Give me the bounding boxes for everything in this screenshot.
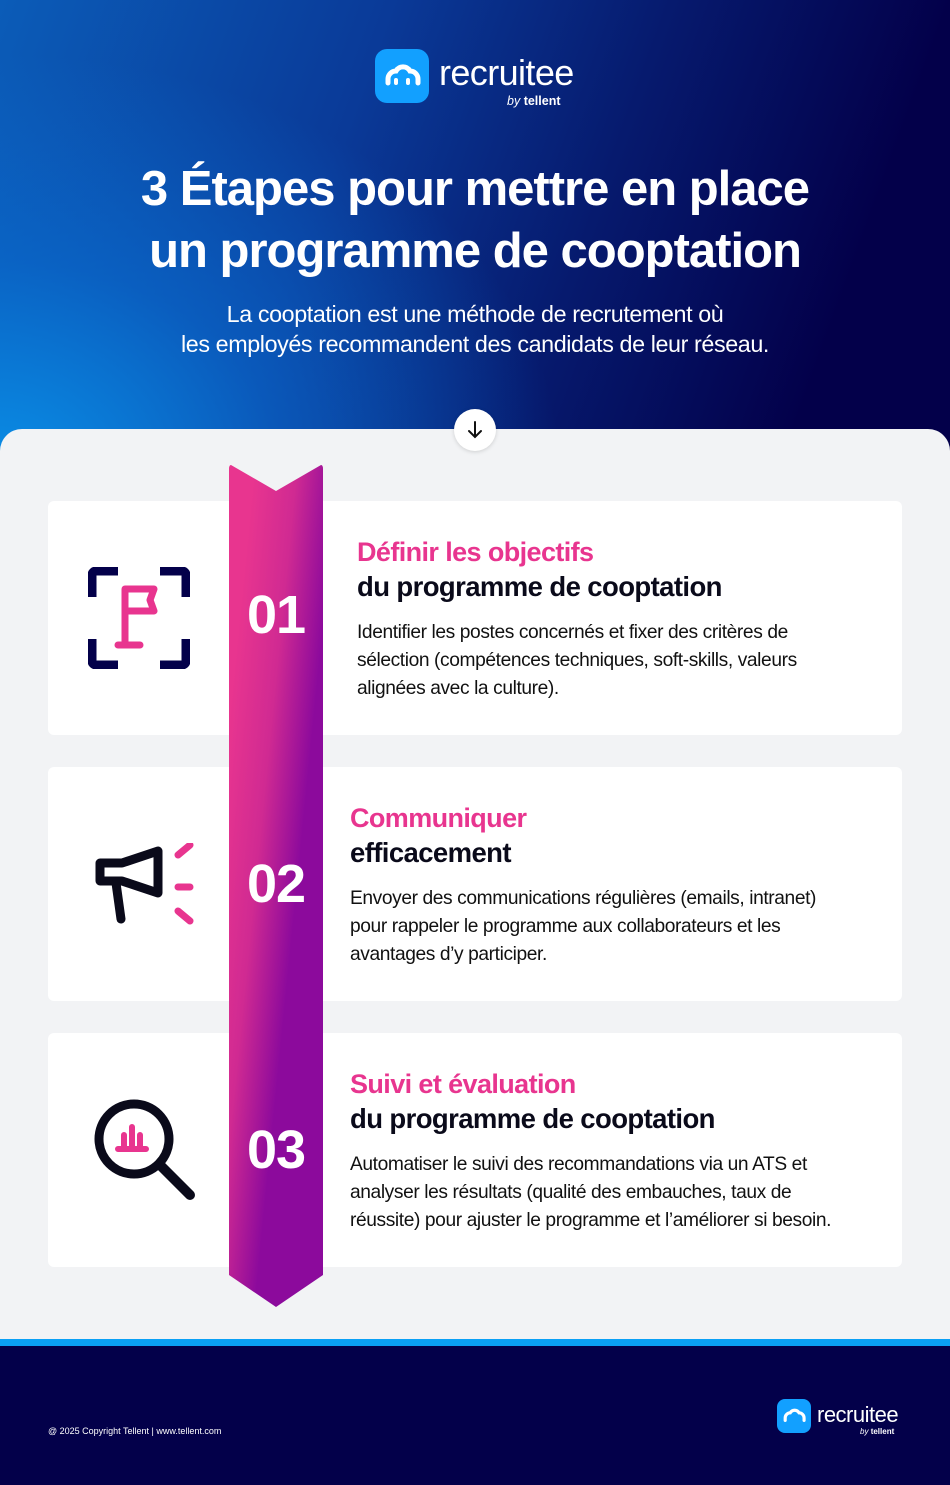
footer stripe bbox=[0, 1339, 950, 1346]
logo bbox=[375, 49, 574, 108]
card 3: du programme de cooptation bbox=[350, 1103, 715, 1134]
subtitle bbox=[181, 301, 769, 357]
footer logo: recruitee bbox=[817, 1402, 898, 1427]
icon: megaphone bbox=[96, 843, 194, 924]
ribbon bbox=[229, 465, 323, 1307]
card 1: du programme de cooptation bbox=[357, 571, 722, 602]
icon: magnifier chart bbox=[94, 1100, 195, 1200]
card 2: pour rappeler le programme aux collaborateurs et les bbox=[350, 916, 780, 937]
card 1: alignées avec la culture). bbox=[357, 678, 559, 699]
card 1 bbox=[48, 501, 902, 735]
card 3: Automatiser le suivi des recommandations via un ATS et bbox=[350, 1154, 807, 1175]
icon: flag bbox=[88, 567, 190, 669]
number 02: 02 bbox=[247, 854, 305, 914]
card 2: Envoyer des communications régulières (emails, intranet) bbox=[350, 888, 816, 909]
card 2: efficacement bbox=[350, 837, 511, 868]
number 01: 01 bbox=[247, 585, 305, 645]
title bbox=[141, 161, 809, 278]
card 3: réussite) pour ajuster le programme et l’améliorer si besoin. bbox=[350, 1210, 831, 1231]
subtitle: La cooptation est une méthode de recrutement où bbox=[227, 301, 723, 327]
subtitle: les employés recommandent des candidats de leur réseau. bbox=[181, 331, 769, 357]
title: 3 Étapes pour mettre en place bbox=[141, 162, 809, 216]
footer logo bbox=[777, 1399, 898, 1436]
footer logo: by tellent bbox=[860, 1427, 894, 1436]
title: un programme de cooptation bbox=[149, 224, 801, 278]
card 1: Définir les objectifs bbox=[357, 537, 593, 567]
icon: logo cloud bbox=[375, 49, 429, 103]
number 03: 03 bbox=[247, 1120, 305, 1180]
card 2: Communiquer bbox=[350, 803, 526, 833]
card 3: Suivi et évaluation bbox=[350, 1069, 576, 1099]
card 3: analyser les résultats (qualité des embauches, taux de bbox=[350, 1182, 791, 1203]
logo: recruitee bbox=[439, 52, 574, 93]
card 2: avantages d’y participer. bbox=[350, 944, 547, 965]
icon: down arrow bbox=[454, 409, 496, 451]
card 1: Identifier les postes concernés et fixer des critères de bbox=[357, 622, 788, 643]
logo: by tellent bbox=[507, 94, 560, 108]
card 2 bbox=[48, 767, 902, 1001]
card 3 bbox=[48, 1033, 902, 1267]
footer copyright: @ 2025 Copyright Tellent | www.tellent.com bbox=[48, 1426, 221, 1436]
card 1: sélection (compétences techniques, soft-skills, valeurs bbox=[357, 650, 797, 671]
